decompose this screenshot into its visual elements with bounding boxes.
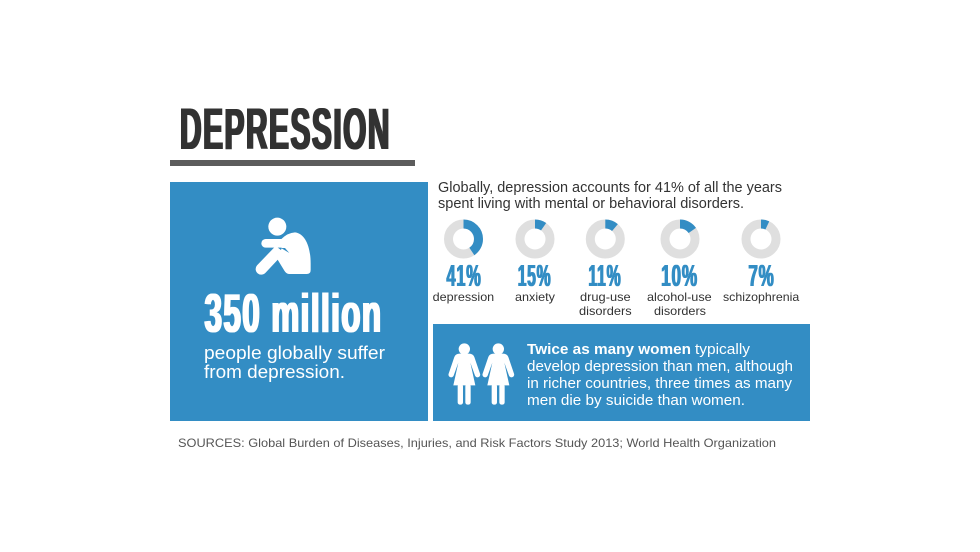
title underline bar <box>170 160 415 166</box>
caption: from depression. <box>204 362 345 382</box>
panel: women and men <box>433 324 810 421</box>
donut chart: alcohol-use disorders 10%: disorders <box>654 304 706 318</box>
donut chart: alcohol-use disorders 10% <box>647 224 712 318</box>
donut chart: drug-use disorders 11%: 11% <box>588 258 621 293</box>
donut chart: alcohol-use disorders 10%: 10% <box>661 258 698 293</box>
sources: SOURCES: Global Burden of Diseases, Injuries, and Risk Factors Study 2013; World Health Organization <box>178 436 776 450</box>
donut chart: alcohol-use disorders 10%: alcohol-use <box>647 290 712 304</box>
donut chart: depression 41%: depression <box>433 290 494 304</box>
donut chart: anxiety 15%: 15% <box>518 258 551 293</box>
donut chart: schizophrenia 7%: 7% <box>748 258 775 293</box>
donut chart: anxiety 15%: anxiety <box>515 290 555 304</box>
panel: 350 million <box>170 182 428 421</box>
callout text: typically <box>695 342 751 358</box>
callout text: men die by suicide than women. <box>527 393 745 409</box>
title: DEPRESSION <box>180 97 391 162</box>
donut chart: schizophrenia 7%: schizophrenia <box>723 290 800 304</box>
icon: seated person hugging knees <box>256 218 311 275</box>
callout text: develop depression than men, although <box>527 359 793 375</box>
big number: 350 million <box>204 282 382 344</box>
donut chart: schizophrenia 7% <box>723 224 800 304</box>
donut chart: drug-use disorders 11% <box>579 224 632 318</box>
intro text: Globally, depression accounts for 41% of all the years <box>438 180 782 196</box>
icon: two women <box>448 343 514 405</box>
donut chart: anxiety 15% <box>515 224 555 304</box>
callout text: in richer countries, three times as many <box>527 376 793 392</box>
callout text: Twice as many women <box>527 342 691 358</box>
caption: people globally suffer <box>204 343 385 363</box>
donut chart: depression 41%: 41% <box>446 258 482 293</box>
intro text: spent living with mental or behavioral disorders. <box>438 196 744 212</box>
donut chart: depression 41% <box>433 224 494 304</box>
donut chart: drug-use disorders 11%: drug-use <box>580 290 631 304</box>
donut chart: drug-use disorders 11%: disorders <box>579 304 632 318</box>
